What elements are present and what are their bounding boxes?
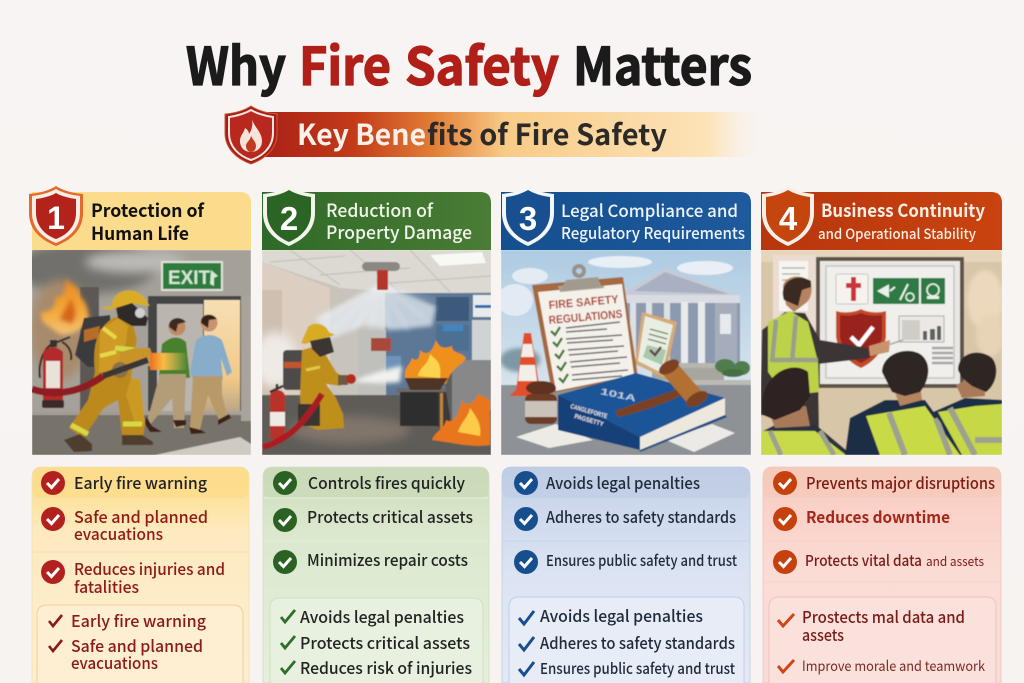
item: safe and planned evacuations: [41, 504, 208, 545]
item: protects vital data and assets: [773, 550, 984, 574]
item: reduces injuries and fatalities: [41, 556, 225, 598]
sub box: extra benefits: [509, 597, 744, 683]
whiteboard: [816, 257, 964, 388]
subtitle banner: fits of Fire Safety: [427, 112, 667, 154]
panel 3: legal compliance: [497, 186, 751, 455]
illustration: firefighter guiding evacuees to exit: EXIT: [168, 268, 210, 289]
illustration: regulations clipboard, courthouse and gavel: REGULATIONS: [548, 309, 623, 327]
sub box: extra benefits: Adheres to safety standards: [540, 630, 735, 654]
list panel 4: [763, 467, 1001, 683]
icon: shield 3: 3: [519, 200, 537, 237]
panel 3 header: Legal Compliance and: [561, 197, 738, 222]
illustration: regulations clipboard, courthouse and gavel: PAGSETTY: [573, 413, 605, 428]
cone: [509, 332, 540, 397]
panel 4 header: and Operational Stability: [818, 224, 976, 244]
illustration: safety training at whiteboard: [761, 250, 1004, 455]
subtitle banner: [225, 106, 760, 164]
water jet: [356, 366, 402, 383]
sub box: extra benefits: Prostects mal data and: [802, 604, 965, 628]
illustration: regulations clipboard, courthouse and gavel: CANGLEFORTE: [569, 403, 608, 421]
papers: [516, 424, 593, 448]
title: Safety: [405, 25, 559, 100]
hose and nozzle: [32, 376, 103, 393]
icon: shield 3: [502, 186, 554, 246]
panel 2 header: Property Damage: [326, 219, 472, 245]
fire: [41, 278, 89, 335]
icon: shield 4: [762, 186, 814, 246]
firefighter: [283, 350, 306, 390]
burning machine: [396, 388, 446, 394]
sub box: extra benefits: Avoids legal penalties: [540, 603, 703, 627]
panel 1: protection of human life: [15, 186, 251, 455]
sub box: extra benefits: Early fire warning: [71, 608, 206, 632]
illustration: regulations clipboard, courthouse and gavel: FIRE SAFETY: [548, 294, 619, 312]
title: Matters: [573, 25, 752, 100]
item: safe and planned evacuations: evacuations: [74, 521, 163, 545]
icon: shield 2: 2: [280, 200, 298, 237]
item: reduces injuries and fatalities: fatalities: [74, 574, 139, 598]
item: protects vital data and assets: and assets: [926, 551, 984, 570]
item: reduces downtime: Reduces downtime: [806, 504, 950, 528]
illustration: regulations clipboard, courthouse and gavel: [497, 250, 751, 455]
man green: [168, 318, 186, 336]
panel 1 header: Protection of: [91, 197, 205, 223]
sub box: extra benefits: Ensures public safety and trust: [540, 658, 735, 679]
extinguisher: [270, 390, 285, 440]
sub box: extra benefits: Avoids legal penalties: [300, 604, 464, 628]
title: Why: [186, 25, 286, 100]
hose: [263, 394, 322, 447]
list panel 3: [502, 467, 750, 683]
item: minimizes repair costs: Minimizes repair costs: [307, 547, 468, 571]
subtitle banner: Key Bene: [297, 112, 426, 154]
item: early fire warning: Early fire warning: [74, 470, 207, 494]
icon: shield 1: [29, 186, 83, 246]
icon: shield 2: [263, 186, 315, 246]
item: adheres to safety standards: Adheres to safety standards: [546, 504, 736, 528]
item: ensures public safety and trust: Ensures public safety and trust: [546, 550, 737, 571]
panel 2 header: [262, 192, 491, 250]
illustration: sprinkler and firefighter controlling fire: [253, 250, 491, 455]
sub box: extra benefits: [37, 605, 243, 683]
panel 3 header: Regulatory Requirements: [561, 220, 745, 244]
panel 2: reduction of property damage: [253, 186, 491, 455]
board shield: [836, 309, 886, 368]
chart: [899, 316, 944, 342]
sub box: extra benefits: evacuations: [71, 650, 158, 674]
gavel: [615, 388, 684, 417]
item: protects critical assets: Protects critical assets: [307, 504, 473, 528]
list panel 2: [263, 467, 489, 683]
sub box: extra benefits: assets: [802, 622, 844, 646]
certificate: [635, 312, 677, 378]
fire: [405, 340, 466, 384]
panel 3 header: [501, 192, 751, 250]
man blue: [200, 314, 218, 332]
illustration: firefighter guiding evacuees to exit: [32, 250, 251, 455]
extinguisher: [40, 344, 52, 378]
list panel 1: [32, 467, 249, 683]
icon: banner shield with flame: [225, 106, 277, 164]
icon: shield 1: 1: [47, 200, 65, 236]
audience: [763, 424, 846, 455]
item: safe and planned evacuations: Safe and planned: [74, 504, 208, 528]
item: prevents major disruptions: Prevents major disruptions: [806, 470, 995, 494]
presenter: [761, 312, 870, 430]
book: [558, 373, 725, 437]
item: protects vital data and assets: Protects vital data: [805, 550, 922, 571]
title: [186, 25, 752, 100]
panel 1 header: Human Life: [91, 220, 189, 246]
sub box: extra benefits: Improve morale and teamwork: [802, 656, 985, 676]
item: controls fires quickly: Controls fires quickly: [308, 470, 465, 494]
panel 4 header: Business Continuity: [821, 197, 986, 223]
exit sign: [161, 261, 223, 291]
illustration: regulations clipboard, courthouse and gavel: 101A: [600, 386, 638, 404]
door: [148, 296, 241, 411]
clipboard: [532, 277, 638, 393]
panel 1 header: [32, 192, 251, 250]
item: avoids legal penalties: Avoids legal penalties: [546, 470, 700, 494]
sprinkler spray: [316, 283, 436, 340]
jar: [526, 381, 556, 395]
icon: shield 4: 4: [779, 200, 798, 237]
item: ensures public safety and trust: [514, 550, 737, 574]
firefighter: [75, 315, 112, 367]
courthouse: [625, 268, 740, 296]
panel 4: business continuity: [761, 186, 1004, 455]
panel 2 header: Reduction of: [326, 197, 434, 223]
item: reduces injuries and fatalities: Reduces injuries and: [74, 556, 225, 580]
panel 4 header: [761, 192, 1002, 250]
title: Fire: [299, 25, 391, 100]
sub box: extra benefits: [270, 598, 483, 683]
sub box: extra benefits: Protects critical assets: [300, 630, 470, 654]
sub box: extra benefits: [769, 597, 996, 683]
sub box: extra benefits: Safe and planned: [71, 633, 203, 657]
sub box: extra benefits: Reduces risk of injuries: [300, 655, 472, 679]
